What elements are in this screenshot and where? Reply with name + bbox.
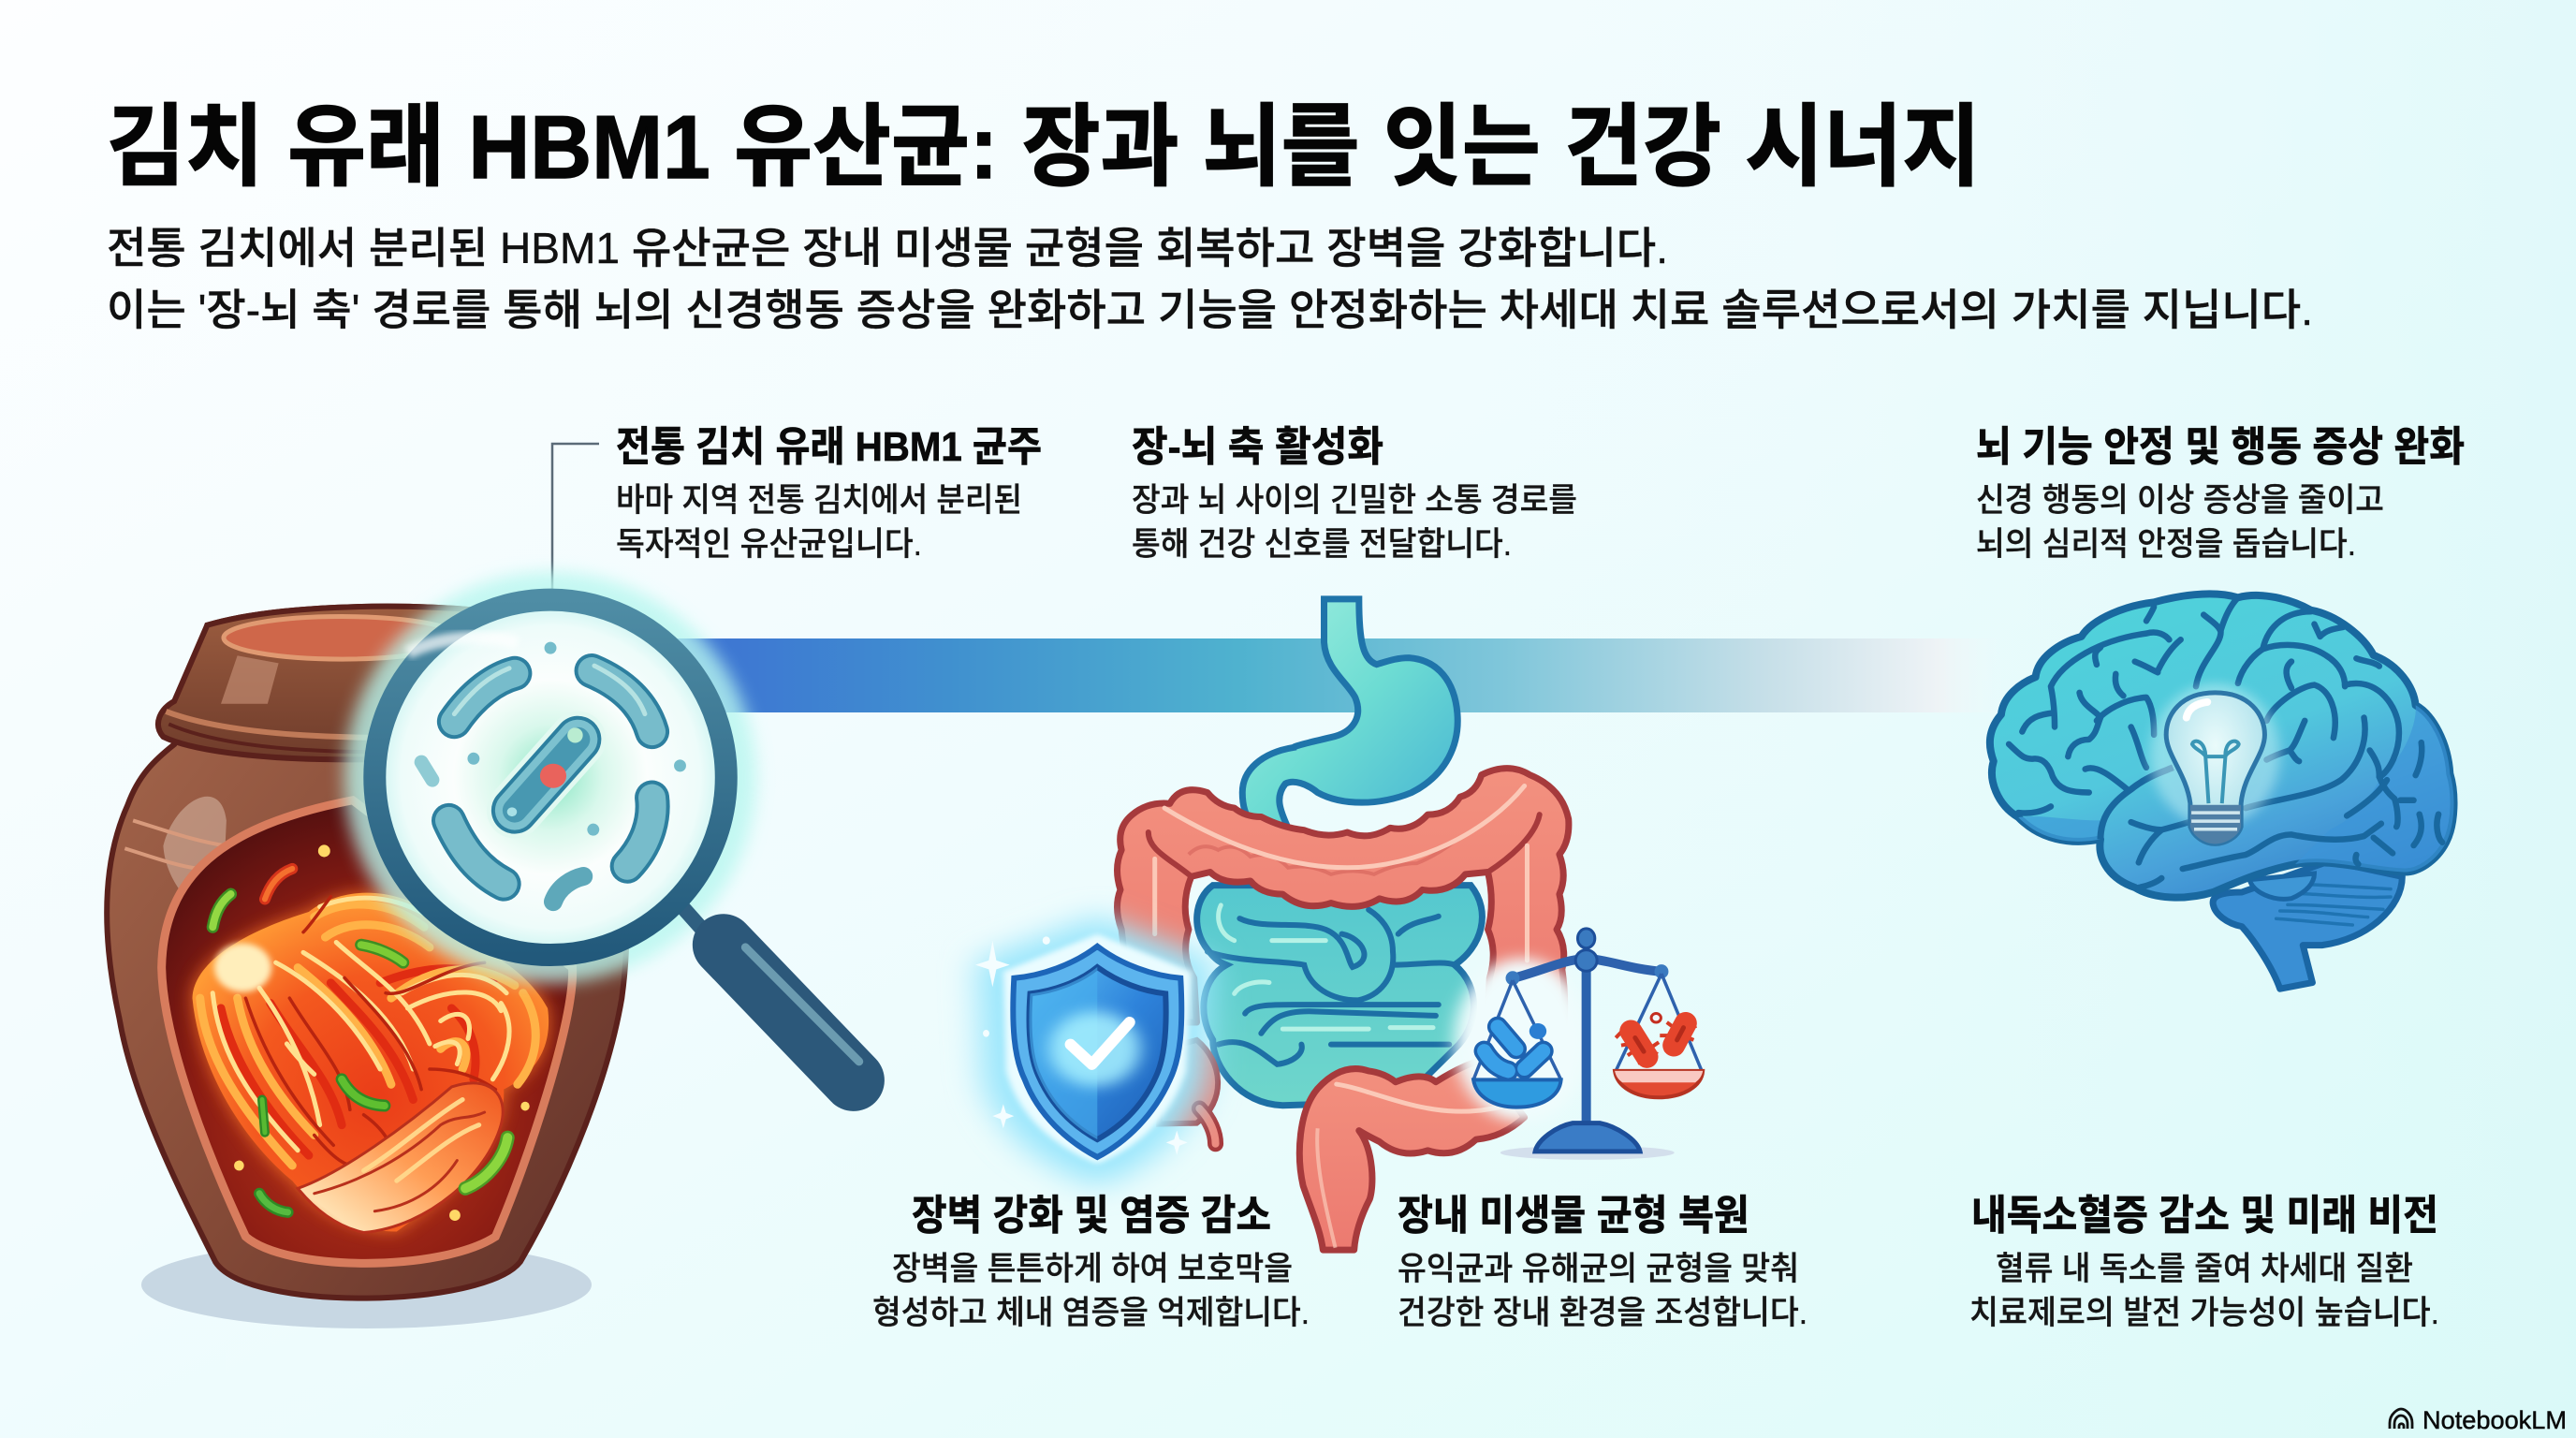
icon: digestive system <box>1118 599 1569 1250</box>
label: gut-brain axis: 통해 건강 신호를 전달합니다. <box>1132 526 1512 563</box>
icon: balance scale <box>1455 929 1703 1160</box>
subtitle: 전통 김치에서 분리된 HBM1 유산균은 장내 미생물 균형을 회복하고 장벽을 강화합니다. <box>107 224 1668 272</box>
label: brain function <box>1976 424 2465 563</box>
icon: kimchi jar <box>107 607 627 1328</box>
label: endotoxemia: 혈류 내 독소를 줄여 차세대 질환 <box>1996 1251 2413 1287</box>
good bacteria pan <box>1473 1023 1561 1108</box>
label: brain function: 뇌의 심리적 안정을 돕습니다. <box>1976 526 2356 563</box>
subtitle: 이는 '장-뇌 축' 경로를 통해 뇌의 신경행동 증상을 완화하고 기능을 안정화하는 차세대 치료 솔루션으로서의 가치를 지닙니다. <box>107 286 2313 334</box>
subtitle <box>107 224 2313 334</box>
label: brain function: 신경 행동의 이상 증상을 줄이고 <box>1976 482 2384 519</box>
label: HBM1 strain: 독자적인 유산균입니다. <box>616 526 922 563</box>
label: intestinal wall: 장벽 강화 및 염증 감소 <box>912 1193 1271 1239</box>
title: 김치 유래 HBM1 유산균: 장과 뇌를 잇는 건강 시너지 <box>107 97 1981 198</box>
label: endotoxemia: 내독소혈증 감소 및 미래 비전 <box>1971 1193 2438 1239</box>
label: intestinal wall: 장벽을 튼튼하게 하여 보호막을 <box>892 1251 1293 1287</box>
label: endotoxemia <box>1969 1193 2439 1331</box>
label: microbiome balance: 장내 미생물 균형 복원 <box>1398 1193 1749 1239</box>
label: microbiome balance: 건강한 장내 환경을 조성합니다. <box>1398 1295 1808 1331</box>
label: gut-brain axis: 장-뇌 축 활성화 <box>1132 424 1383 470</box>
label: intestinal wall: 형성하고 체내 염증을 억제합니다. <box>872 1295 1310 1331</box>
colon <box>1118 769 1569 1040</box>
icon: brain with light bulb <box>1990 594 2453 989</box>
label: HBM1 strain <box>616 424 1042 563</box>
NotebookLM logo: NotebookLM <box>2422 1406 2567 1434</box>
stomach <box>1242 599 1457 828</box>
label: gut-brain axis: 장과 뇌 사이의 긴밀한 소통 경로를 <box>1132 482 1577 519</box>
icon: magnifying glass with bacteria <box>344 572 859 1080</box>
label: HBM1 strain: 전통 김치 유래 HBM1 균주 <box>616 424 1042 470</box>
label: microbiome balance <box>1398 1193 1808 1331</box>
label: endotoxemia: 치료제로의 발전 가능성이 높습니다. <box>1969 1295 2439 1331</box>
gut-brain pathway bar <box>655 638 2012 712</box>
label: gut-brain axis <box>1132 424 1577 563</box>
label: HBM1 strain: 바마 지역 전통 김치에서 분리된 <box>616 482 1022 519</box>
label: intestinal wall <box>872 1193 1310 1331</box>
label: microbiome balance: 유익균과 유해균의 균형을 맞춰 <box>1398 1251 1799 1287</box>
harmful bacteria pan <box>1615 1014 1703 1097</box>
rectum <box>1299 1060 1525 1250</box>
small intestine <box>1197 886 1482 1106</box>
appendix <box>1159 1040 1218 1144</box>
label: brain function: 뇌 기능 안정 및 행동 증상 완화 <box>1976 424 2465 470</box>
leader line <box>552 444 599 599</box>
icon: protective shield <box>975 917 1213 1186</box>
light bulb <box>2166 693 2264 844</box>
